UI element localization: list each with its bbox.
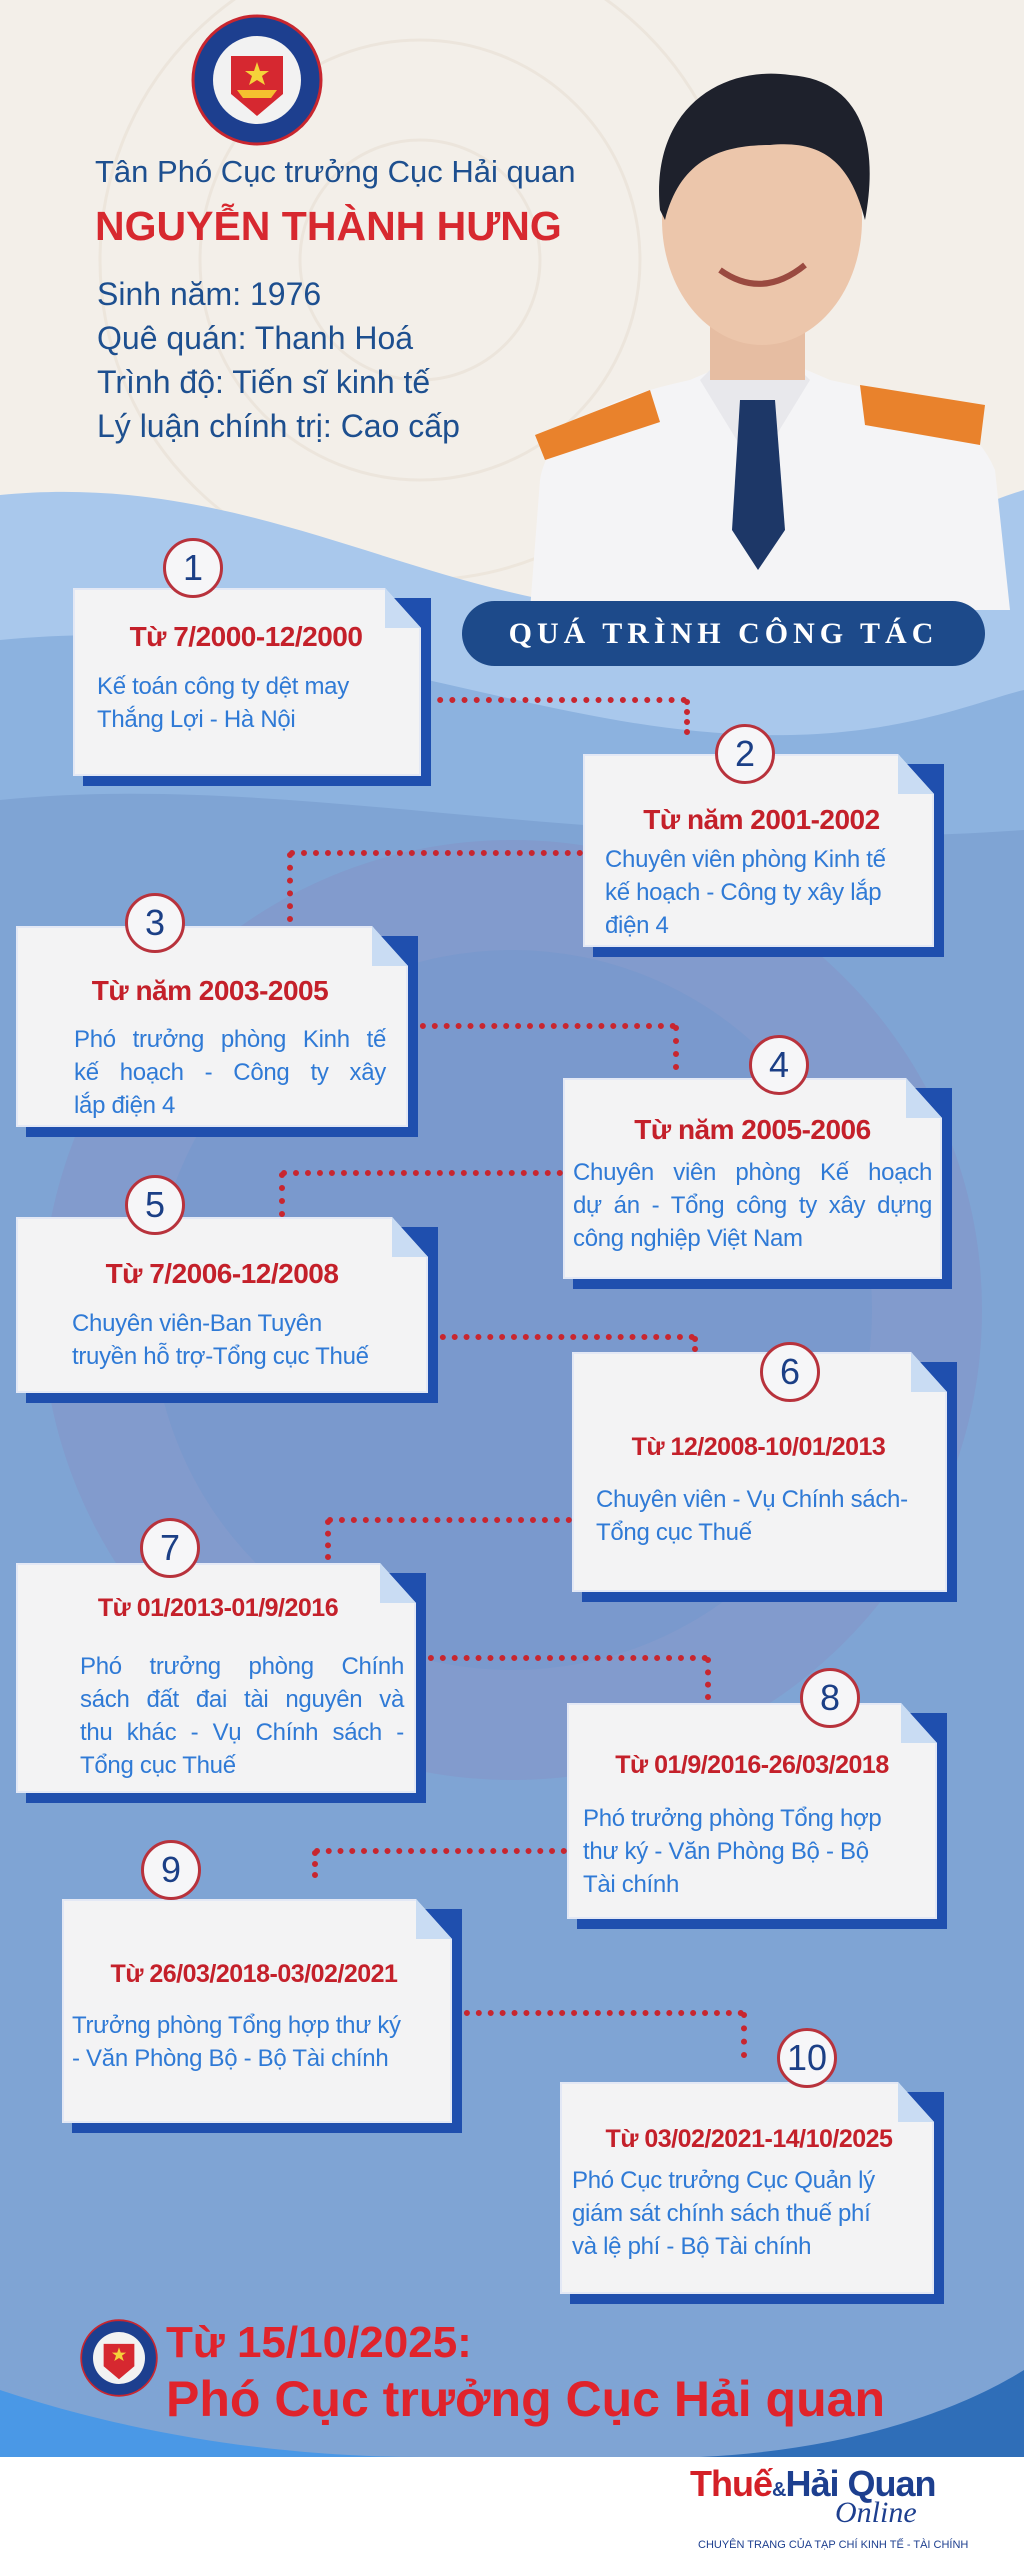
card 8 <box>567 1703 947 1929</box>
card 8: Phó trưởng phòng Tổng hợp <box>583 1805 881 1832</box>
card 2 <box>583 754 944 957</box>
personal info: Lý luận chính trị: Cao cấp <box>97 408 460 444</box>
number 10: 10 <box>787 2037 827 2078</box>
number 8: 8 <box>820 1677 840 1718</box>
card 4 <box>563 1078 952 1289</box>
number 9: 9 <box>161 1849 181 1890</box>
final position: Phó Cục trưởng Cục Hải quan <box>166 2371 885 2427</box>
number 10 <box>777 2028 837 2088</box>
card 2: điện 4 <box>605 912 669 939</box>
heading pill <box>462 601 985 666</box>
card 1 <box>73 588 431 786</box>
final position: Từ 15/10/2025: <box>166 2318 472 2367</box>
number 9 <box>141 1840 201 1900</box>
number 8 <box>800 1668 860 1728</box>
number 7: 7 <box>160 1527 180 1568</box>
number 5: 5 <box>145 1184 165 1225</box>
number 5 <box>125 1175 185 1235</box>
card 10: giám sát chính sách thuế phí <box>572 2200 870 2227</box>
card 7: sách đất đai tài nguyên và <box>80 1686 404 1713</box>
card 6 <box>572 1352 957 1602</box>
card 2: Từ năm 2001-2002 <box>643 804 880 835</box>
card 4: Từ năm 2005-2006 <box>634 1114 871 1145</box>
number 4: 4 <box>769 1044 789 1085</box>
card 10: Từ 03/02/2021-14/10/2025 <box>606 2125 892 2153</box>
card 9: - Văn Phòng Bộ - Bộ Tài chính <box>72 2045 388 2072</box>
final position <box>166 2318 885 2427</box>
card 8: thư ký - Văn Phòng Bộ - Bộ <box>583 1838 869 1865</box>
card 9 <box>62 1899 462 2133</box>
card 7: thu khác - Vụ Chính sách - <box>80 1719 404 1746</box>
card 1: Thắng Lợi - Hà Nội <box>97 706 295 733</box>
card 10: và lệ phí - Bộ Tài chính <box>572 2233 811 2260</box>
number 3: 3 <box>145 902 165 943</box>
card 9: Trưởng phòng Tổng hợp thư ký <box>72 2012 401 2039</box>
card 5: truyền hỗ trợ-Tổng cục Thuế <box>72 1343 369 1370</box>
title: Tân Phó Cục trưởng Cục Hải quan <box>95 154 576 189</box>
number 7 <box>140 1518 200 1578</box>
card 7 <box>16 1563 426 1803</box>
card 3: lắp điện 4 <box>74 1092 175 1119</box>
card 3: Từ năm 2003-2005 <box>92 975 328 1006</box>
card 4: công nghiệp Việt Nam <box>573 1225 803 1252</box>
personal info: Quê quán: Thanh Hoá <box>97 320 413 356</box>
number 4 <box>749 1035 809 1095</box>
number 2 <box>715 724 775 784</box>
name: NGUYỄN THÀNH HƯNG <box>95 203 562 249</box>
card 3: kế hoạch - Công ty xây <box>74 1059 386 1086</box>
card 2: kế hoạch - Công ty xây lắp <box>605 879 881 906</box>
number 2: 2 <box>735 733 755 774</box>
card 7: Phó trưởng phòng Chính <box>80 1653 404 1680</box>
card 4: dự án - Tổng công ty xây dựng <box>573 1192 932 1219</box>
card 2: Chuyên viên phòng Kinh tế <box>605 846 886 873</box>
personal info: Sinh năm: 1976 <box>97 276 321 312</box>
card 9: Từ 26/03/2018-03/02/2021 <box>111 1960 397 1988</box>
card 7: Từ 01/2013-01/9/2016 <box>98 1594 338 1622</box>
card 3: Phó trưởng phòng Kinh tế <box>74 1026 386 1053</box>
card 4: Chuyên viên phòng Kế hoạch <box>573 1159 932 1186</box>
card 3 <box>16 926 418 1137</box>
personal info: Trình độ: Tiến sĩ kinh tế <box>97 364 430 400</box>
footer brand: CHUYÊN TRANG CỦA TẠP CHÍ KINH TẾ - TÀI CHÍNH <box>698 2539 968 2551</box>
card 5 <box>16 1217 438 1403</box>
heading pill: QUÁ TRÌNH CÔNG TÁC <box>509 617 938 650</box>
card 6: Tổng cục Thuế <box>596 1519 752 1546</box>
card 1: Từ 7/2000-12/2000 <box>130 621 362 652</box>
number 6: 6 <box>780 1351 800 1392</box>
number 3 <box>125 893 185 953</box>
card 6: Chuyên viên - Vụ Chính sách- <box>596 1486 908 1513</box>
card 8: Tài chính <box>583 1871 679 1898</box>
number 6 <box>760 1342 820 1402</box>
card 5: Từ 7/2006-12/2008 <box>106 1258 338 1289</box>
card 1: Kế toán công ty dệt may <box>97 673 349 700</box>
footer brand: Online <box>835 2496 917 2529</box>
card 6: Từ 12/2008-10/01/2013 <box>632 1433 885 1461</box>
personal info <box>97 276 460 444</box>
number 1: 1 <box>183 547 203 588</box>
card 7: Tổng cục Thuế <box>80 1752 236 1779</box>
footer brand: Thuế&Hải Quan <box>690 2463 935 2504</box>
photo: portrait of official <box>530 74 1010 610</box>
card 10: Phó Cục trưởng Cục Quản lý <box>572 2167 875 2194</box>
small logo <box>80 2319 158 2397</box>
logo: Vietnam Customs emblem <box>192 14 322 146</box>
card 10 <box>560 2082 944 2304</box>
card 8: Từ 01/9/2016-26/03/2018 <box>615 1751 889 1779</box>
card 5: Chuyên viên-Ban Tuyên <box>72 1310 322 1337</box>
number 1 <box>163 538 223 598</box>
footer brand <box>690 2463 968 2551</box>
